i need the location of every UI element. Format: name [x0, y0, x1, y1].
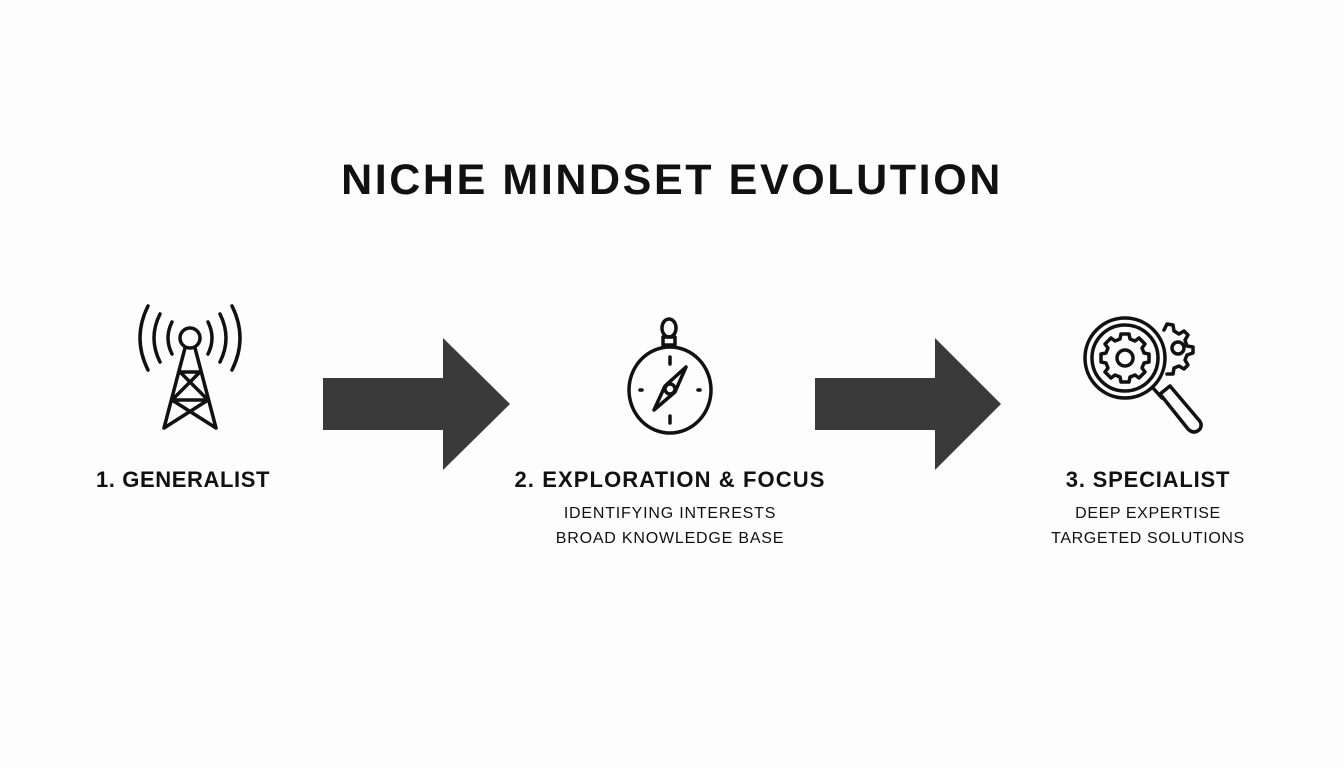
text: specialist details — [1051, 505, 1245, 547]
icon: magnifier with gears — [1083, 316, 1203, 434]
text: specialist details: DEEP EXPERTISE — [1075, 505, 1221, 522]
label: specialist: 3. SPECIALIST — [1066, 467, 1230, 492]
text: exploration details: IDENTIFYING INTERESTS — [564, 505, 776, 522]
arrow 2 — [815, 338, 1001, 470]
text: specialist details: TARGETED SOLUTIONS — [1051, 530, 1245, 547]
label: exploration & focus: 2. EXPLORATION & FOCUS — [514, 467, 826, 492]
icon: radio tower — [138, 304, 242, 430]
title: NICHE MINDSET EVOLUTION — [341, 156, 1003, 204]
text: exploration details: BROAD KNOWLEDGE BASE — [556, 530, 784, 547]
text: exploration details — [556, 505, 784, 547]
label: generalist: 1. GENERALIST — [96, 467, 270, 492]
arrow 1 — [323, 338, 510, 470]
icon: compass — [627, 317, 713, 435]
